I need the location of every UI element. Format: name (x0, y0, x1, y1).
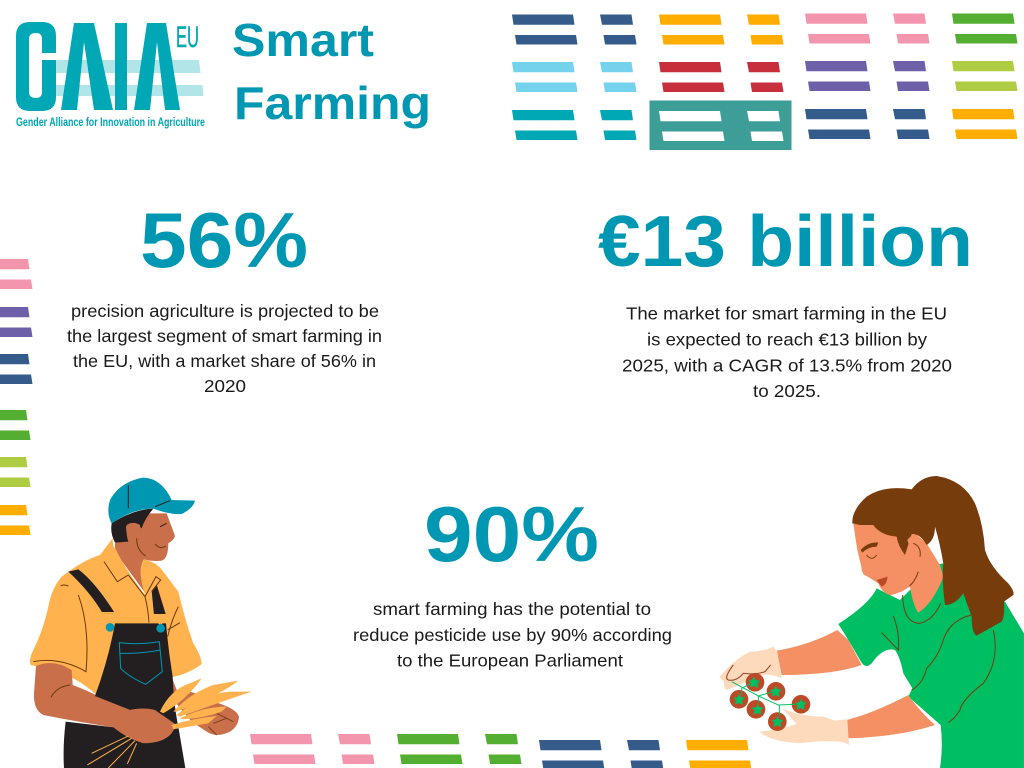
text: 56% description: the largest segment of smart farming in (67, 326, 382, 346)
lower arm (847, 695, 935, 738)
text: market description: to 2025. (753, 381, 821, 401)
hair and ponytail (852, 476, 1014, 636)
dress (838, 563, 1024, 768)
logo tagline: Gender Alliance for Innovation in Agriculture (16, 115, 205, 129)
text: market description (622, 304, 952, 401)
face details (861, 543, 878, 553)
cap (108, 478, 195, 523)
glove upper (719, 647, 782, 690)
illustration: farmer with wheat (30, 478, 252, 768)
ear (907, 536, 922, 558)
decorative bars: bottom (250, 734, 752, 768)
text: pesticide description (353, 599, 672, 670)
stat: 13 billion euro: €13 billion (598, 202, 973, 282)
text: 56% description: 2020 (204, 376, 246, 396)
wheat (160, 678, 252, 729)
details (33, 538, 180, 697)
text: pesticide description: to the European Parliament (397, 650, 623, 670)
pocket (119, 642, 162, 684)
shirt (30, 538, 202, 695)
text: market description: The market for smart farming in the EU (626, 304, 947, 324)
decorative bars: left edge (0, 259, 32, 535)
text: 56% description: the EU, with a market share of 56% in (73, 351, 376, 371)
text: market description: 2025, with a CAGR of 13.5% from 2020 (622, 356, 952, 376)
far forearm and hand (172, 677, 239, 735)
title: Smart (232, 14, 374, 66)
face and neck (853, 523, 943, 613)
text: pesticide description: smart farming has the potential to (373, 599, 651, 619)
title (232, 14, 431, 129)
text: pesticide description: reduce pesticide use by 90% according (353, 625, 672, 645)
upper arm (777, 630, 862, 675)
logo: GAIA EU (16, 21, 205, 129)
hair (111, 509, 153, 543)
tomato stars and stem (733, 677, 807, 727)
stat: 90%: 90% (424, 490, 599, 578)
tomatoes (746, 673, 764, 692)
buckles (100, 613, 167, 625)
text: 56% description: precision agriculture is projected to be (71, 301, 379, 321)
neck and head (115, 513, 175, 595)
ear (126, 523, 142, 540)
near hand (113, 708, 177, 743)
overalls (64, 623, 185, 768)
text: market description: is expected to reach €13 billion by (647, 330, 927, 350)
glove lower (759, 708, 849, 745)
arm (34, 663, 130, 727)
title: Farming (234, 77, 431, 129)
illustration: woman holding tomatoes (719, 476, 1024, 768)
straps (68, 569, 166, 615)
decorative bars: top right pattern (512, 14, 1024, 150)
text: 56% description (67, 301, 382, 396)
logo: GAIA EU: EU (176, 21, 199, 54)
stat: 56%: 56% (140, 196, 308, 284)
